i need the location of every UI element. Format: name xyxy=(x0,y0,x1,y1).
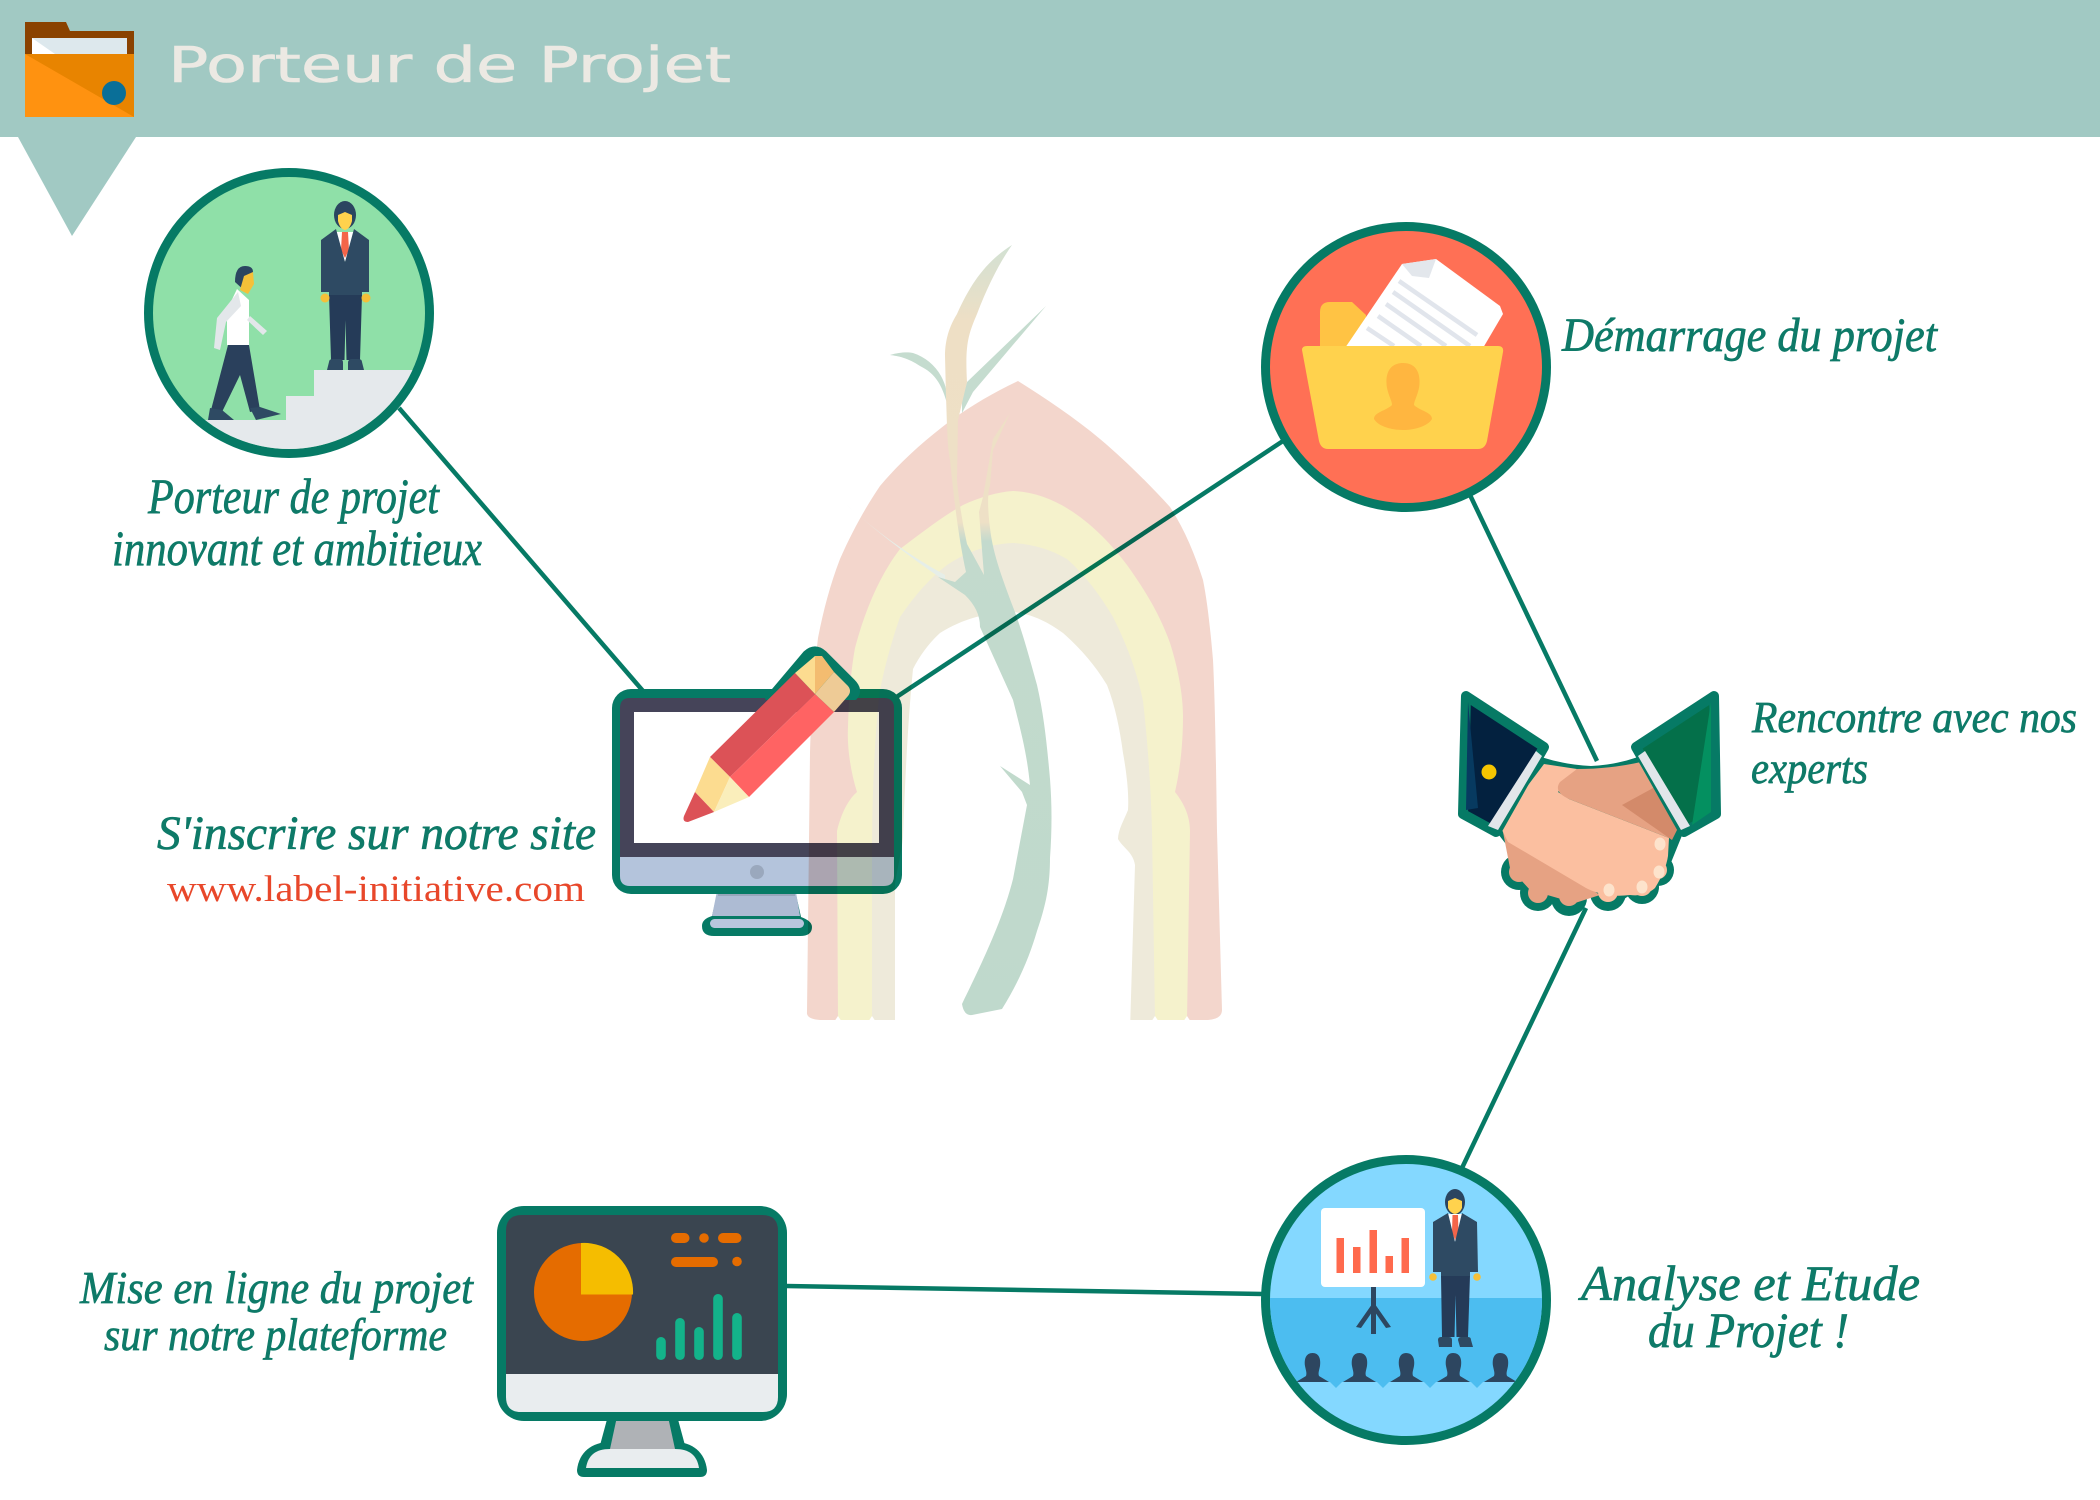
seat markers xyxy=(1330,1382,1483,1388)
text: rencontre avec nos experts: Rencontre avec nos xyxy=(1751,693,2077,742)
connector lines xyxy=(399,408,1597,1294)
stand xyxy=(577,1412,707,1477)
presentation board xyxy=(1321,1208,1425,1334)
panel: porteur de projet circle xyxy=(140,168,440,470)
watermark: arch and plant logo xyxy=(807,245,1222,1030)
icon: monitor xyxy=(612,689,902,936)
text: rencontre avec nos experts xyxy=(1751,693,2077,793)
plant xyxy=(840,245,1052,1015)
icon: orange folder xyxy=(25,22,134,117)
text: mise en ligne: Mise en ligne du projet xyxy=(79,1262,474,1313)
text: porteur de projet xyxy=(112,468,482,576)
text: analyse et etude: du Projet ! xyxy=(1648,1302,1849,1358)
pie chart xyxy=(534,1243,633,1341)
website url: www.label-initiative.com xyxy=(167,869,585,910)
icon: dashboard monitor xyxy=(497,1206,787,1477)
presenter xyxy=(1429,1189,1481,1347)
fingers xyxy=(1598,836,1668,902)
text: porteur de projet: innovant et ambitieux xyxy=(112,520,482,576)
stairs xyxy=(205,370,412,449)
text: porteur de projet: Porteur de projet xyxy=(147,468,440,524)
fingernails xyxy=(1604,838,1666,896)
text: rencontre avec nos experts: experts xyxy=(1751,744,1868,793)
left cuff xyxy=(1463,696,1544,832)
icon: man climbing xyxy=(208,266,281,420)
text: demarrage du projet: Démarrage du projet xyxy=(1561,309,1939,362)
audience xyxy=(1296,1353,1517,1382)
icon: folder with paper xyxy=(1302,259,1503,449)
text: analyse et etude xyxy=(1578,1255,1920,1358)
arch bands xyxy=(807,381,1222,1030)
text: analyse et etude: Analyse et Etude xyxy=(1578,1255,1920,1311)
text: s'inscrire: S'inscrire sur notre site xyxy=(157,807,596,860)
right cuff xyxy=(1636,696,1716,832)
lobes xyxy=(1503,832,1600,906)
floor band xyxy=(1270,1298,1542,1382)
icon: handshake xyxy=(1463,696,1716,916)
icon: pencil xyxy=(684,648,858,822)
main hand xyxy=(1499,764,1669,896)
upper hand xyxy=(1558,762,1680,838)
title: Porteur de Projet xyxy=(168,37,731,94)
text: s'inscrire xyxy=(157,807,596,910)
text: mise en ligne xyxy=(79,1262,474,1360)
panel: demarrage circle xyxy=(1261,222,1551,512)
header banner xyxy=(0,0,2100,236)
legend marks xyxy=(671,1233,742,1267)
bar chart xyxy=(656,1294,742,1360)
icon: man in suit xyxy=(320,201,370,370)
panel: analyse circle xyxy=(1250,1155,1560,1445)
text: mise en ligne: sur notre plateforme xyxy=(104,1309,447,1360)
hand outline xyxy=(1495,757,1685,916)
